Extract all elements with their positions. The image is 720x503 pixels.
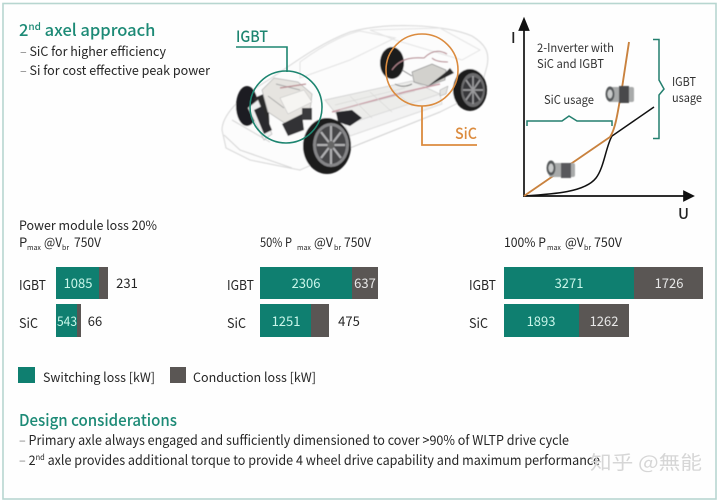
chart text: SiC and IGBT (537, 55, 604, 72)
chart heading: br (62, 243, 69, 253)
callout: IGBT (236, 25, 322, 143)
chart: 100% load loss: 3271 (555, 273, 583, 292)
chart: power module loss 20%: SiC (19, 312, 38, 332)
chart: 100% load loss: 1262 (590, 311, 618, 330)
chart heading: @V (314, 232, 333, 251)
chart: inverter operating curve: U (678, 203, 689, 224)
x axis (524, 192, 693, 200)
heading: 2nd axel approach: 2 (19, 17, 28, 41)
icon: inverter upper (606, 86, 634, 103)
car illustration (222, 26, 488, 174)
legend: Switching loss [kW] (43, 367, 155, 386)
chart: power module loss 20% (19, 215, 157, 337)
SiC plus IGBT curve (524, 42, 629, 196)
chart heading: @V (565, 232, 584, 251)
text block: axle bullets: – Si for cost effective peak power (20, 60, 211, 79)
chart: 50% load loss: 475 (338, 311, 360, 330)
heading: 2nd axel approach: nd (28, 18, 41, 33)
chart: 50% load loss: IGBT (227, 274, 254, 294)
chart heading (19, 215, 157, 253)
chart heading (504, 232, 622, 253)
chart: 100% load loss (469, 232, 703, 337)
rear right wheel (453, 69, 487, 111)
chart text: SiC usage (544, 91, 594, 108)
text block: design bullets: – Primary axle always engaged and sufficiently dimensioned to cover >90% of WLTP drive cycle (19, 429, 569, 449)
front right wheel (303, 118, 351, 174)
chart: 100% load loss: 1893 (527, 311, 555, 330)
front motor (254, 92, 270, 136)
chart text: 2-Inverter with (537, 39, 614, 56)
legend: Conduction loss [kW] (193, 367, 316, 386)
chart heading: max (297, 243, 311, 253)
chart: 50% load loss: 1251 (272, 311, 300, 330)
chart heading: br (334, 243, 341, 253)
rear motor (412, 64, 446, 86)
chart: power module loss 20%: 231 (116, 273, 138, 292)
chart: inverter operating curve (511, 19, 702, 224)
chart heading: 750V (74, 232, 101, 251)
chart: power module loss 20%: 543 (57, 311, 77, 330)
chart: 50% load loss (227, 232, 378, 337)
chart heading: @V (44, 232, 62, 251)
text block: design bullets: axle provides additional torque to provide 4 wheel drive capability and maximum performance (45, 449, 600, 469)
battery pack (325, 81, 440, 125)
heading: 2nd axel approach: axel approach (41, 17, 155, 41)
chart heading: max (27, 243, 41, 253)
chart: power module loss 20%: 66 (88, 311, 102, 330)
chart text (537, 39, 702, 108)
chart heading: 750V (344, 232, 371, 251)
text block: design bullets: – 2 (19, 449, 36, 469)
SiC usage bracket (527, 116, 612, 126)
chart heading (260, 232, 371, 253)
watermark: 知乎 @無能 (590, 448, 702, 475)
chart heading: P (19, 232, 27, 251)
chart: 50% load loss: 637 (354, 273, 376, 292)
inverter box under floor (336, 110, 362, 126)
callout: SiC: SiC (455, 122, 477, 144)
chart heading: 50% P (260, 232, 292, 251)
text block: design bullets (19, 429, 600, 469)
legend (18, 367, 316, 386)
chart heading: max (547, 243, 561, 253)
chart heading: br (584, 243, 591, 253)
chart: power module loss 20%: IGBT (19, 274, 46, 294)
chart: 100% load loss: IGBT (469, 274, 496, 294)
chart: 50% load loss: SiC (227, 312, 246, 332)
axis labels: I (511, 27, 516, 48)
chart text: IGBT (672, 73, 696, 90)
callout: SiC (386, 34, 477, 145)
text block: axle bullets: – SiC for higher efficiency (20, 41, 166, 60)
chart: 100% load loss: 1726 (655, 273, 683, 292)
chart heading: Power module loss 20% (19, 215, 157, 234)
chart: power module loss 20%: 1085 (64, 273, 92, 292)
front left wheel (236, 86, 258, 126)
rear left wheel (380, 47, 404, 79)
icon: inverter lower (546, 160, 575, 178)
text block: axle bullets (20, 41, 211, 79)
text block: design bullets: nd (36, 452, 45, 463)
chart: 50% load loss: 2306 (292, 273, 320, 292)
chart: 100% load loss: SiC (469, 312, 488, 332)
chart text: usage (672, 89, 702, 106)
heading: design considerations: Design considerations (19, 407, 177, 431)
chart heading: 750V (594, 232, 622, 251)
y axis (520, 19, 528, 197)
IGBT usage bracket (653, 40, 664, 138)
chart heading: 100% P (504, 232, 546, 251)
IGBT curve (524, 107, 654, 196)
callout: IGBT: IGBT (236, 25, 268, 47)
